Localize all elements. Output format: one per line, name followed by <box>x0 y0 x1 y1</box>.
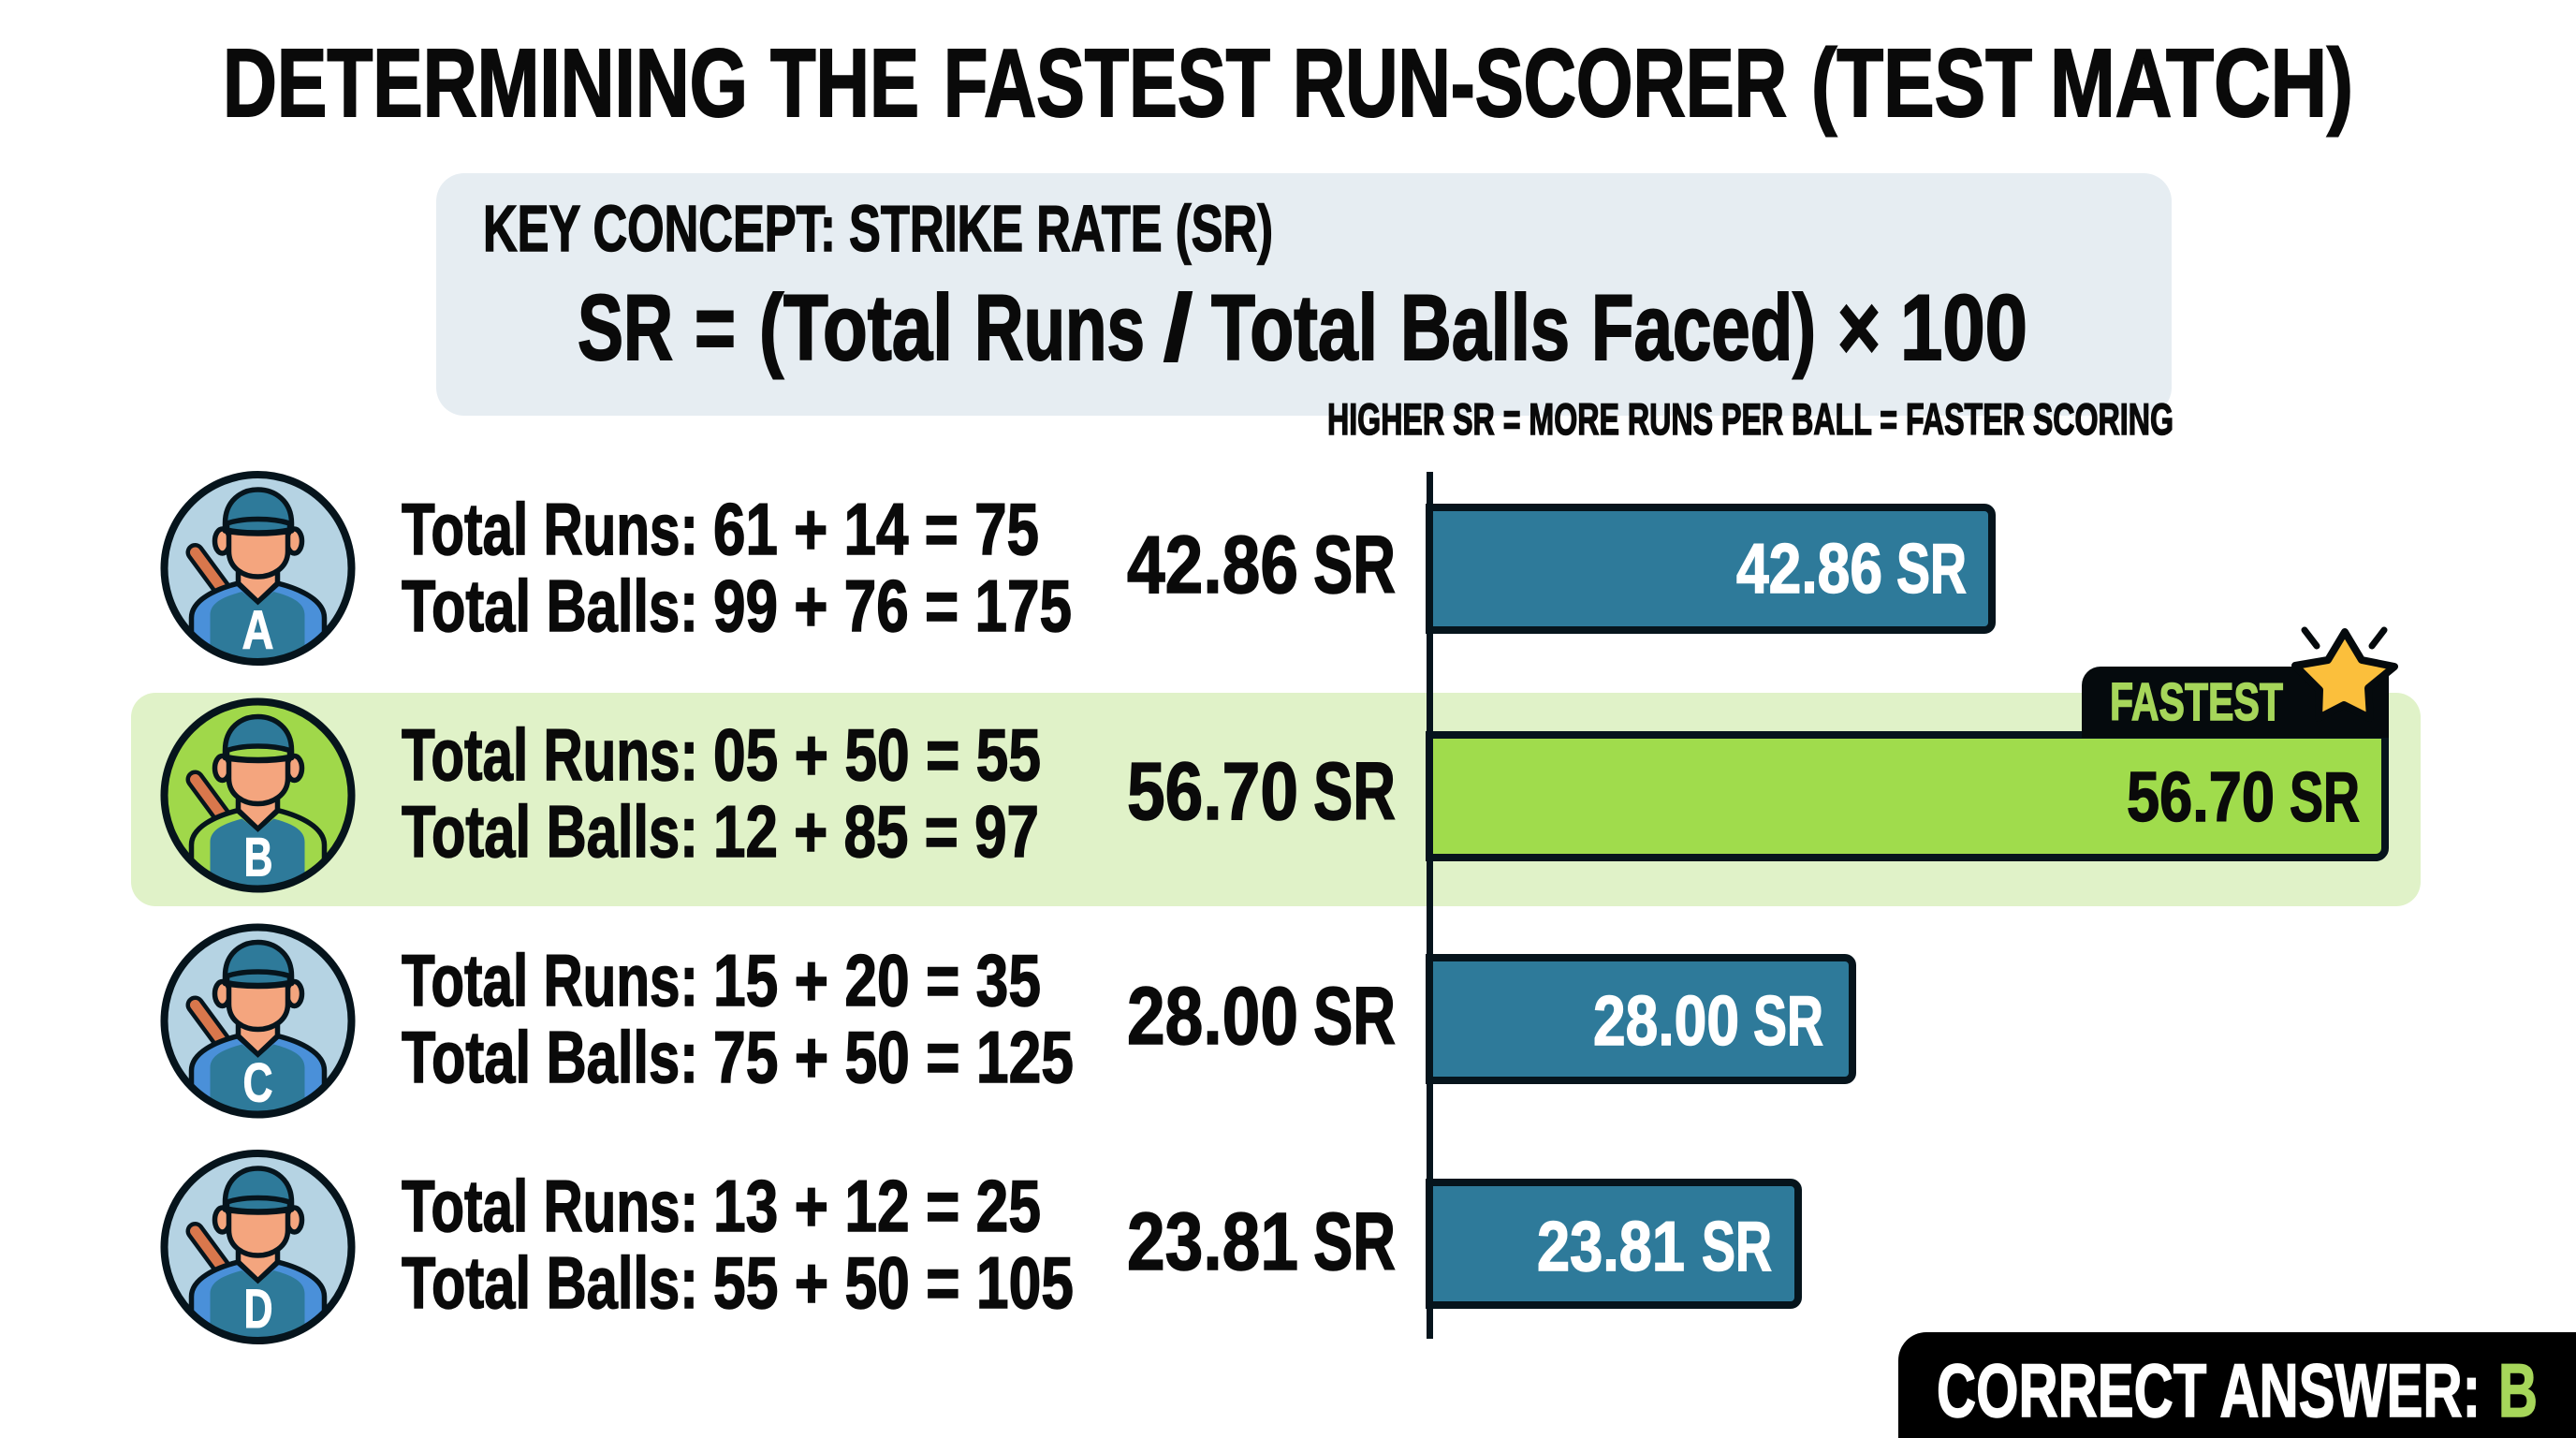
player A strike rate: SR <box>1313 520 1396 610</box>
player A strike rate: 42.86 <box>1127 520 1298 610</box>
title: DETERMINING <box>223 29 748 137</box>
player C strike rate: 28.00 <box>1127 971 1298 1062</box>
jersey letter D: D <box>243 1279 273 1340</box>
bar D: 23.81 <box>1537 1207 1685 1285</box>
bar C: 28.00 <box>1593 981 1739 1060</box>
strike rate formula: Runs <box>974 275 1145 379</box>
player B totals: Total Runs: <box>402 713 698 796</box>
player D avatar <box>165 1153 352 1350</box>
player D totals <box>402 1165 1074 1324</box>
player A avatar <box>165 475 352 671</box>
bar chart: strike rates <box>1427 472 2385 1339</box>
player C strike rate: SR <box>1313 971 1396 1062</box>
player B strike rate: 56.70 <box>1127 746 1298 837</box>
player B totals <box>402 713 1041 873</box>
title: (TEST <box>1811 29 2032 137</box>
bar A: SR <box>1896 529 1967 608</box>
answer letter: B <box>2498 1349 2538 1433</box>
jersey letter A: A <box>242 600 273 661</box>
strike rate formula: 100 <box>1900 275 2027 379</box>
player A totals: Total Balls: <box>402 565 698 647</box>
chart axis <box>1427 472 1433 1339</box>
player C totals: Total Runs: <box>402 939 698 1021</box>
jersey letter B: B <box>243 828 273 888</box>
player D totals: Total Balls: <box>402 1241 698 1324</box>
highlight band: player B row <box>131 693 2421 906</box>
player B totals: 05 + 50 = 55 <box>713 713 1041 796</box>
strike rate formula: SR <box>578 275 673 379</box>
strike rate formula: Faced) <box>1591 275 1816 379</box>
strike rate formula: / <box>1164 275 1193 379</box>
bar C: SR <box>1753 981 1823 1060</box>
correct answer badge <box>1898 1332 2576 1438</box>
player D totals: 55 + 50 = 105 <box>713 1241 1074 1324</box>
key concept heading: KEY CONCEPT: STRIKE RATE (SR) <box>483 192 1273 265</box>
player C totals: Total Balls: <box>402 1016 698 1098</box>
player B totals: 12 + 85 = 97 <box>713 790 1039 873</box>
bar B: 56.70 <box>2127 757 2275 836</box>
title: MATCH) <box>2050 29 2353 137</box>
strike rate formula: Total <box>1211 275 1378 379</box>
player A totals: Total Runs: <box>402 488 698 570</box>
title: RUN-SCORER <box>1293 29 1787 137</box>
bar A: 42.86 <box>1736 529 1882 608</box>
bar C <box>1429 958 1852 1080</box>
bar D <box>1429 1182 1798 1305</box>
formula note: HIGHER SR = MORE RUNS PER BALL = FASTER SCORING <box>1327 394 2174 444</box>
player D totals: Total Runs: <box>402 1165 698 1247</box>
bar B: SR <box>2290 757 2360 836</box>
title: FASTEST <box>944 29 1270 137</box>
player B totals: Total Balls: <box>402 790 698 873</box>
player C totals: 15 + 20 = 35 <box>713 939 1041 1021</box>
icon: star with sparks <box>2295 630 2394 718</box>
strike rate formula: = <box>695 275 736 379</box>
bar D: SR <box>1702 1207 1772 1285</box>
title: THE <box>770 29 919 137</box>
player D totals: 13 + 12 = 25 <box>713 1165 1041 1247</box>
fastest tag <box>2082 667 2389 738</box>
player D strike rate: 23.81 <box>1127 1196 1298 1287</box>
player A totals: 61 + 14 = 75 <box>713 488 1039 570</box>
panel: key concept <box>436 173 2172 416</box>
strike rate formula: Balls <box>1400 275 1570 379</box>
player B strike rate: SR <box>1313 746 1396 837</box>
player A totals <box>402 488 1072 647</box>
jersey letter C: C <box>243 1052 273 1114</box>
player D strike rate: SR <box>1313 1196 1396 1287</box>
player C avatar <box>165 927 352 1123</box>
player B avatar <box>165 702 352 899</box>
player A totals: 99 + 76 = 175 <box>713 565 1072 647</box>
strike rate formula <box>578 275 2027 379</box>
strike rate formula: (Total <box>759 275 953 379</box>
strike rate formula: × <box>1837 275 1881 379</box>
title <box>223 29 2353 137</box>
bar B <box>1429 735 2385 858</box>
player C totals <box>402 939 1074 1098</box>
fastest label: FASTEST <box>2110 672 2283 732</box>
bar A <box>1429 507 1992 630</box>
player C totals: 75 + 50 = 125 <box>713 1016 1074 1098</box>
